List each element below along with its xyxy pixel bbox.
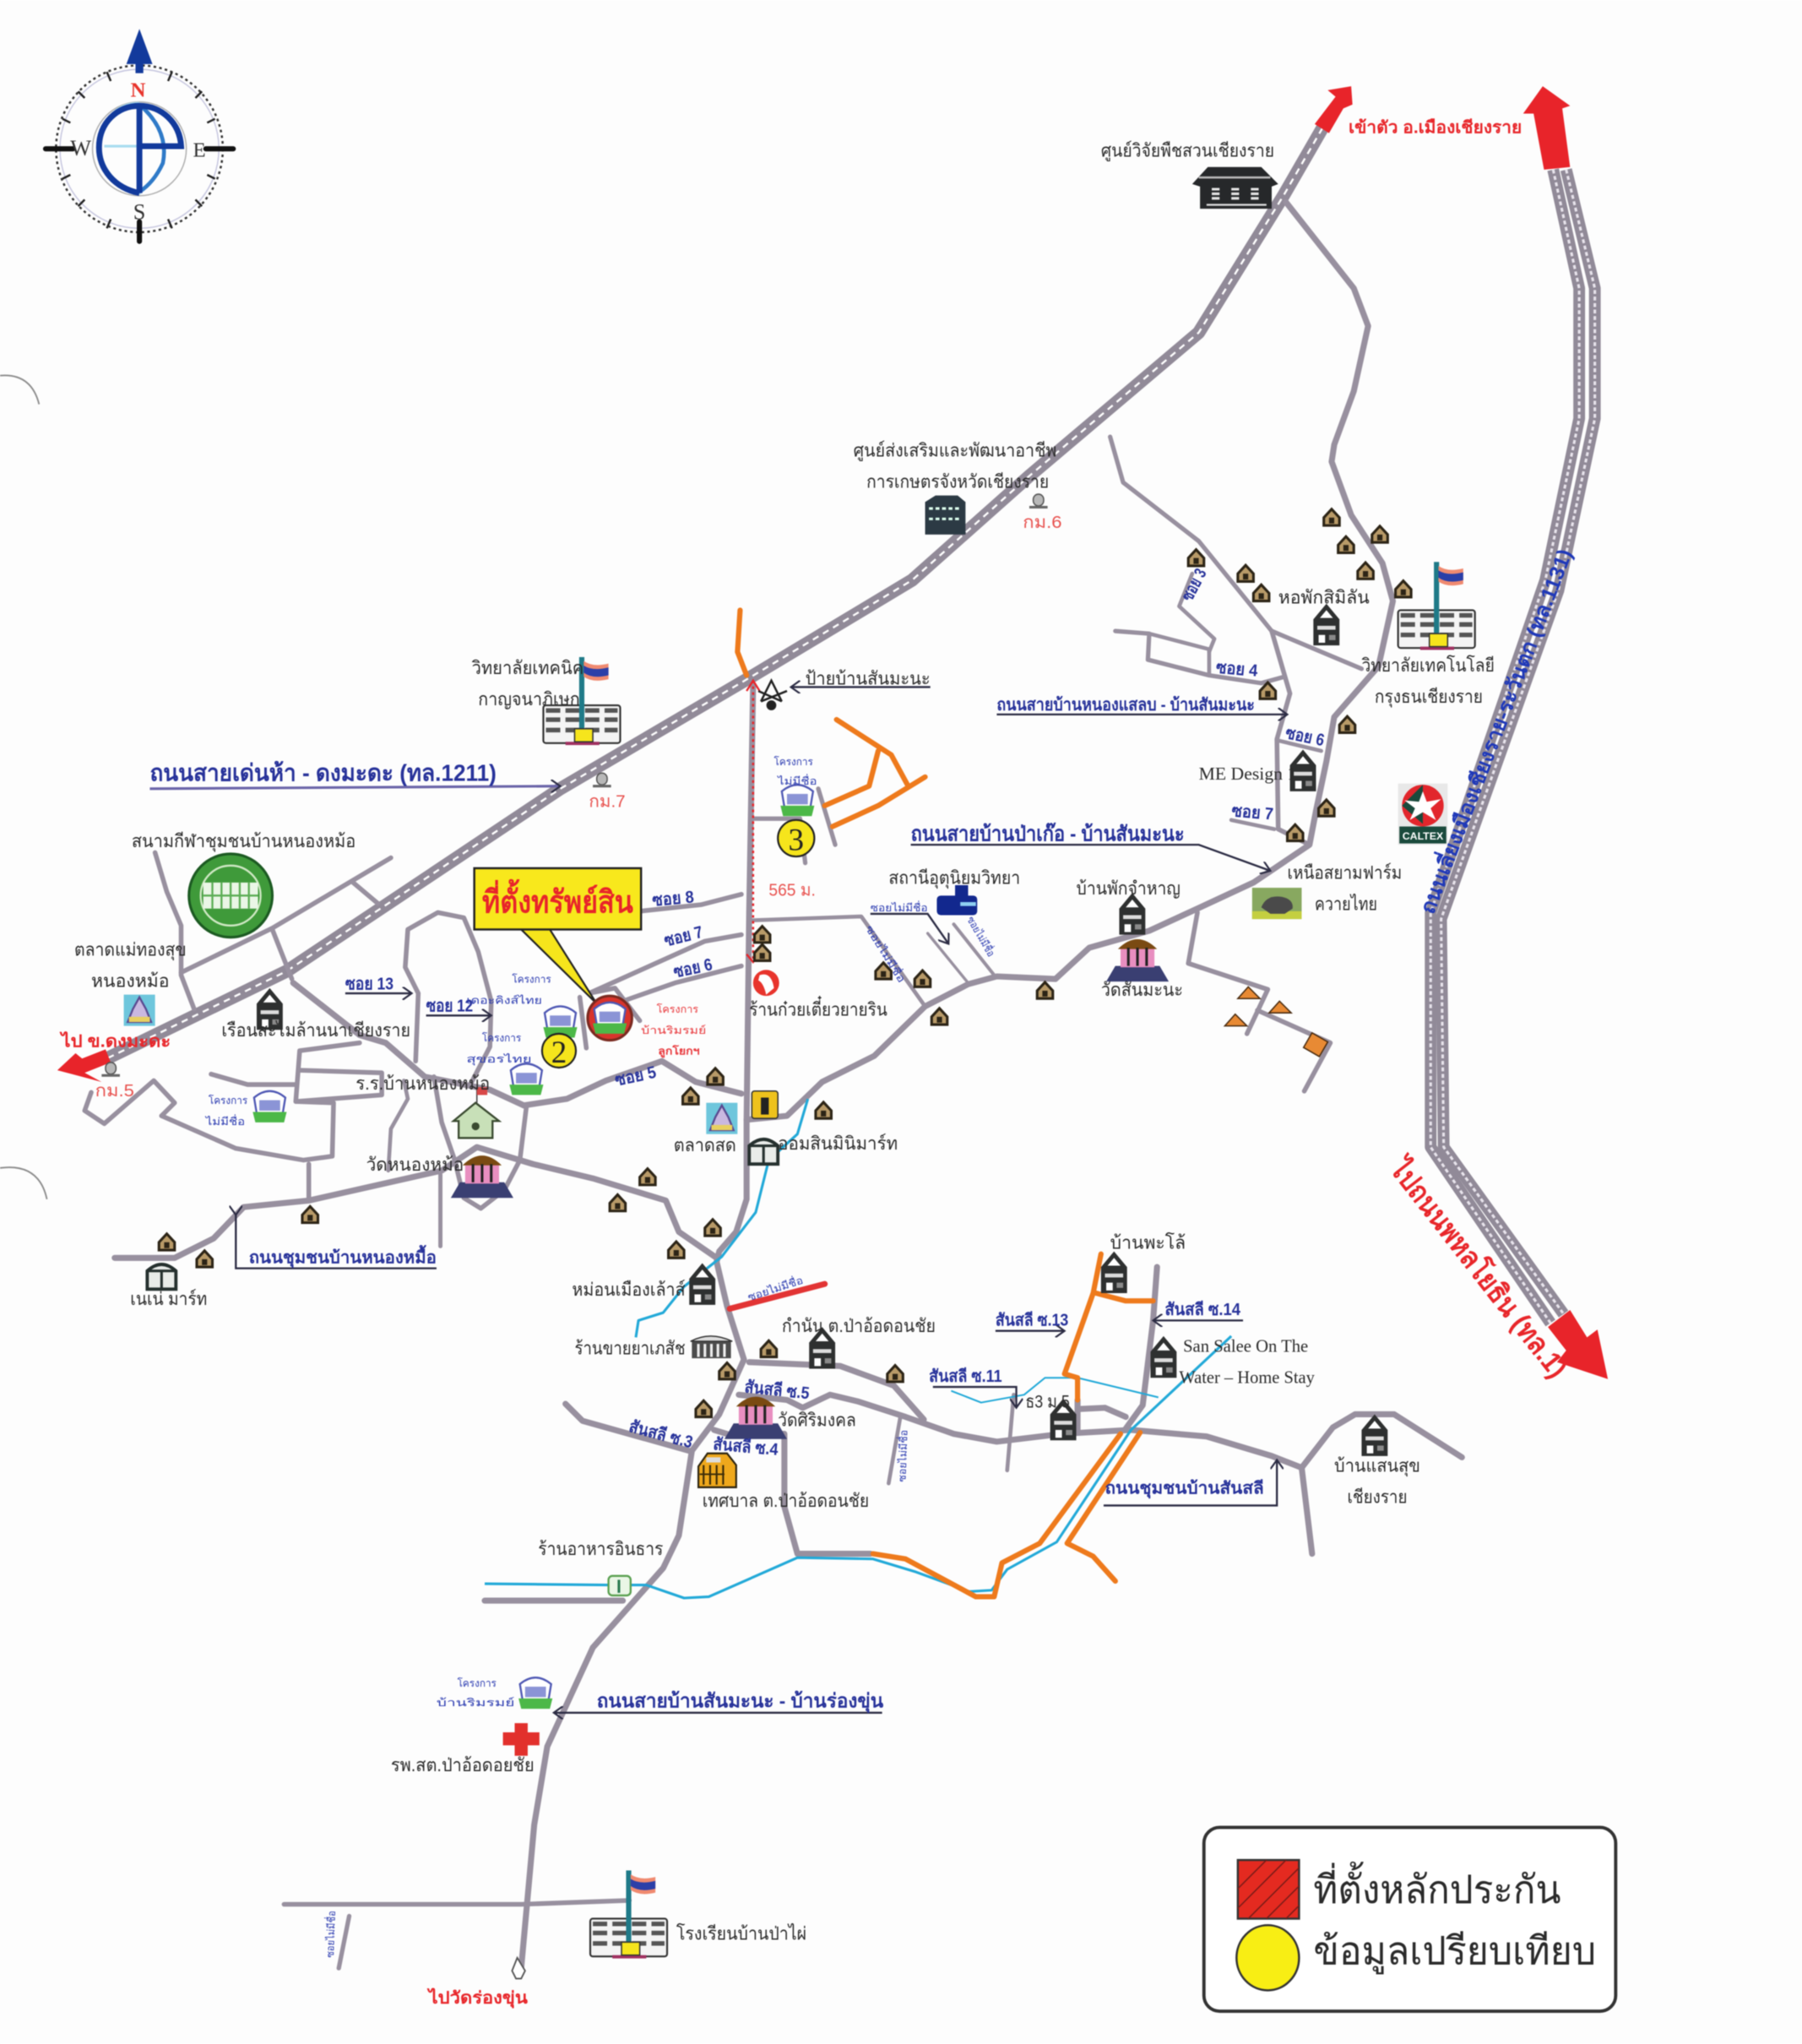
comparable marker 2 [542, 1034, 576, 1070]
highway 1211 [107, 128, 1322, 1058]
red direction labels: ไปถนนพหลโยธิน (ทล.1) [1381, 1150, 1575, 1384]
soi labels: ซอย 5 [613, 1063, 658, 1090]
leader lines [149, 687, 1288, 1713]
project icons [252, 785, 814, 1709]
place labels: หอพักสิมิลัน [1278, 587, 1370, 608]
565 m distance marker [746, 681, 816, 962]
project labels: ลูกโยกฯ [658, 1045, 700, 1058]
satellite tower [758, 681, 787, 709]
soi labels: สันสลี ซ.5 [744, 1377, 811, 1403]
place labels: ร้านขายยาเภสัช [574, 1337, 686, 1358]
caltex logo: CALTEX [1403, 830, 1444, 842]
place labels: เทศบาล ต.ป่าอ้อดอนชัย [703, 1490, 869, 1511]
soi labels: ซอย 7 [1231, 802, 1274, 824]
soi labels: ซอยไม่มีชื่อ [323, 1911, 338, 1958]
market icons [124, 995, 737, 1134]
comparable marker 3: 3 [789, 823, 804, 857]
project labels: ไม่มีชื่อ [777, 774, 817, 787]
place labels: เรือนสะไมล้านนาเชียงราย [221, 1019, 410, 1041]
agriculture centre building [925, 496, 965, 535]
project labels: เดอะคิงส์ไทย [466, 994, 542, 1006]
mini mart icons [147, 1139, 778, 1289]
soi labels: ซอยไม่มีชื่อ [871, 900, 928, 914]
place labels: รพ.สต.ป่าอ้อดอยชัย [391, 1754, 535, 1775]
place labels: เหนือสยามฟาร์ม [1288, 862, 1402, 883]
place labels: บ้านพักจำหาญ [1077, 878, 1181, 899]
place labels: ร.ร.บ้านหนองหม้อ [356, 1073, 490, 1094]
soi labels: สันสลี ซ.14 [1164, 1300, 1241, 1319]
place labels: กำนัน ต.ป่าอ้อดอนชัย [782, 1315, 936, 1336]
soi labels: ซอย 6 [672, 955, 714, 981]
place labels: วิทยาลัยเทคโนโลยี [1361, 655, 1495, 676]
road name labels: ถนนสายเด่นห้า - ดงมะดะ (ทล.1211) [149, 760, 497, 786]
kilometre labels: กม.7 [589, 792, 626, 811]
road name labels: ถนนสายบ้านหนองแสลบ - บ้านสันมะนะ [996, 695, 1255, 715]
soi labels: ซอยไม่มีชื่อ [746, 1273, 805, 1303]
comparable marker 3 [778, 820, 814, 857]
municipality building [698, 1454, 736, 1487]
tent icons [1224, 987, 1327, 1057]
place labels: เชียงราย [1347, 1486, 1407, 1507]
compass rose [46, 29, 233, 242]
yellow shop icon [752, 1091, 778, 1118]
place labels: ตลาดสด [674, 1134, 736, 1155]
soi labels [323, 566, 1326, 1958]
small house icons [159, 509, 1411, 1417]
soi labels: ซอยไม่มีชื่อ [964, 914, 998, 959]
kilometre labels: กม.5 [95, 1082, 134, 1101]
compass rose: S [133, 199, 145, 224]
red direction arrows [57, 86, 1608, 1379]
place labels [74, 139, 1495, 1943]
road name labels: ถนนเลี่ยงเมืองเชียงราย-ระวันตก (ทล.1131) [1413, 545, 1577, 917]
place labels: ร้านอาหารอินธาร [538, 1538, 663, 1559]
pharmacy icon [691, 1336, 732, 1358]
place labels: ควายไทย [1315, 893, 1377, 914]
temples [451, 939, 1169, 1439]
red closed soi [730, 1284, 825, 1308]
project labels: ไม่มีชื่อ [205, 1114, 245, 1128]
red direction labels: เข้าตัว อ.เมืองเชียงราย [1349, 118, 1522, 138]
project labels: โครงการ [209, 1094, 248, 1106]
roadside shrine icon [609, 1576, 631, 1596]
project labels: โครงการ [657, 1003, 698, 1015]
radio school icon [936, 885, 977, 915]
school green building [453, 1087, 499, 1138]
place labels: สนามกีฬาชุมชนบ้านหนองหม้อ [132, 830, 356, 852]
soi labels: ซอย 13 [345, 975, 394, 993]
place labels: หนองหม้อ [91, 970, 170, 991]
place labels: Water – Home Stay [1179, 1367, 1315, 1387]
road name labels: ถนนสายบ้านสันมะนะ - บ้านร่องขุ่น [597, 1690, 883, 1714]
place labels: บ้านพะโล้ [1110, 1231, 1186, 1253]
legend swatch: collateral location [1238, 1860, 1299, 1919]
callout: property location: ที่ตั้งทรัพย์สิน [482, 878, 633, 919]
legend text: comparable data: ข้อมูลเปรียบเทียบ [1313, 1929, 1596, 1975]
red direction labels: ไป ข.ดงมะดะ [59, 1030, 171, 1051]
place labels: สถานีอุตุนิยมวิทยา [888, 867, 1020, 889]
project labels: โครงการ [512, 973, 551, 986]
place labels: โรงเรียนบ้านป่าไผ่ [676, 1922, 806, 1943]
place labels: ป้ายบ้านสันมะนะ [806, 667, 931, 688]
kilometre labels: กม.6 [1023, 514, 1062, 532]
project labels: สุขอรไทย [466, 1053, 532, 1066]
soi labels: ซอย 7 [662, 923, 705, 950]
place labels: ธ3 ม.5 [1025, 1391, 1070, 1412]
legend text: collateral location: ที่ตั้งหลักประกัน [1313, 1862, 1561, 1911]
soi labels: สันสลี ซ.4 [713, 1434, 779, 1460]
noodle shop icon [753, 970, 779, 996]
kilometre posts [101, 494, 1048, 1077]
project labels: โครงการ [482, 1031, 522, 1044]
legend [1204, 1828, 1615, 2011]
compass rose: E [193, 139, 206, 161]
place labels: ตลาดแม่ทองสุข [74, 938, 187, 960]
place labels: ศูนย์ส่งเสริมและพัฒนาอาชีพ [854, 439, 1056, 461]
place labels: การเกษตรจังหวัดเชียงราย [866, 470, 1049, 492]
legend swatch: comparable data [1236, 1925, 1299, 1990]
place labels: วัดสันมะนะ [1101, 979, 1183, 1000]
place labels: วัดศิริมงคล [778, 1409, 856, 1430]
local roads [84, 202, 1462, 1968]
place labels: ME Design 1 [1199, 764, 1296, 784]
place labels: วัดหนองหม้อ [366, 1154, 464, 1175]
place labels: ออมสินมินิมาร์ท [778, 1133, 898, 1154]
kilometre labels [95, 514, 1062, 1101]
road name labels: ถนนชุมชนบ้านสันสลี [1105, 1479, 1264, 1499]
waterways [485, 1099, 1231, 1598]
soi labels: ซอย 12 [426, 998, 473, 1016]
place labels: กรุงธนเชียงราย [1375, 686, 1483, 708]
place labels: ศูนย์วิจัยพืชสวนเชียงราย [1101, 139, 1274, 161]
road name labels [149, 545, 1577, 1714]
red direction labels: ไปวัดร่องขุ่น [426, 1987, 528, 2009]
project labels: บ้านริมรมย์ [437, 1697, 514, 1709]
project labels: โครงการ [774, 755, 813, 768]
soi labels: ซอยไม่มีชื่อ [894, 1430, 910, 1482]
soi labels: สันสลี ซ.13 [996, 1311, 1068, 1330]
south road end arrow [512, 1958, 525, 1979]
place labels: เนเน่ มาร์ท [130, 1288, 207, 1309]
place labels: ร้านก๋วยเตี๋ยวยายริน [749, 996, 887, 1019]
hospital red cross [503, 1723, 540, 1756]
soi labels: สันสลี ซ.11 [929, 1367, 1002, 1386]
subject property marker [588, 996, 632, 1041]
place labels: San Salee On The [1183, 1335, 1308, 1356]
orange new road segments [737, 610, 1153, 1596]
road name labels: ถนนสายบ้านป่าเก๊อ - บ้านสันมะนะ [911, 823, 1185, 846]
dark house landmarks [257, 604, 1387, 1456]
flagged schools [543, 562, 1475, 1959]
soi labels: ซอย 6 [1284, 724, 1326, 750]
soi labels: สันสลี ซ.3 [627, 1416, 695, 1452]
buffalo photo [1252, 888, 1301, 919]
caltex logo [1398, 784, 1447, 845]
red direction labels [59, 118, 1575, 2009]
soi labels: ซอย 3 [1178, 566, 1211, 604]
road name labels: ถนนชุมชนบ้านหนองหมื้อ [249, 1244, 437, 1268]
compass rose: W [70, 136, 91, 160]
project labels: บ้านริมรมย์ [641, 1025, 706, 1036]
callout: property location [475, 868, 641, 1003]
place labels: วิทยาลัยเทคนิค [472, 657, 583, 678]
565 m distance marker: 565 ม. [768, 881, 816, 900]
project labels: โครงการ [458, 1677, 497, 1689]
project labels [205, 755, 817, 1709]
place labels: หม่อนเมืองเล้าส์ [572, 1279, 686, 1300]
thin side roads [888, 1394, 1013, 1483]
soi labels: ซอย 4 [1215, 659, 1259, 681]
compass rose: N [131, 79, 146, 101]
research centre building [1192, 167, 1278, 209]
place labels: บ้านแสนสุข [1334, 1454, 1420, 1476]
place labels: กาญจนาภิเษก [478, 688, 580, 709]
comparable marker 2: 2 [551, 1036, 567, 1070]
highway 1131 east bypass [1430, 170, 1595, 1323]
binder hole marks [0, 375, 47, 1199]
soi labels: ซอย 8 [652, 888, 695, 911]
stadium icon [189, 854, 272, 938]
soi labels: ซอยไม่มีชื่อ [863, 922, 909, 985]
